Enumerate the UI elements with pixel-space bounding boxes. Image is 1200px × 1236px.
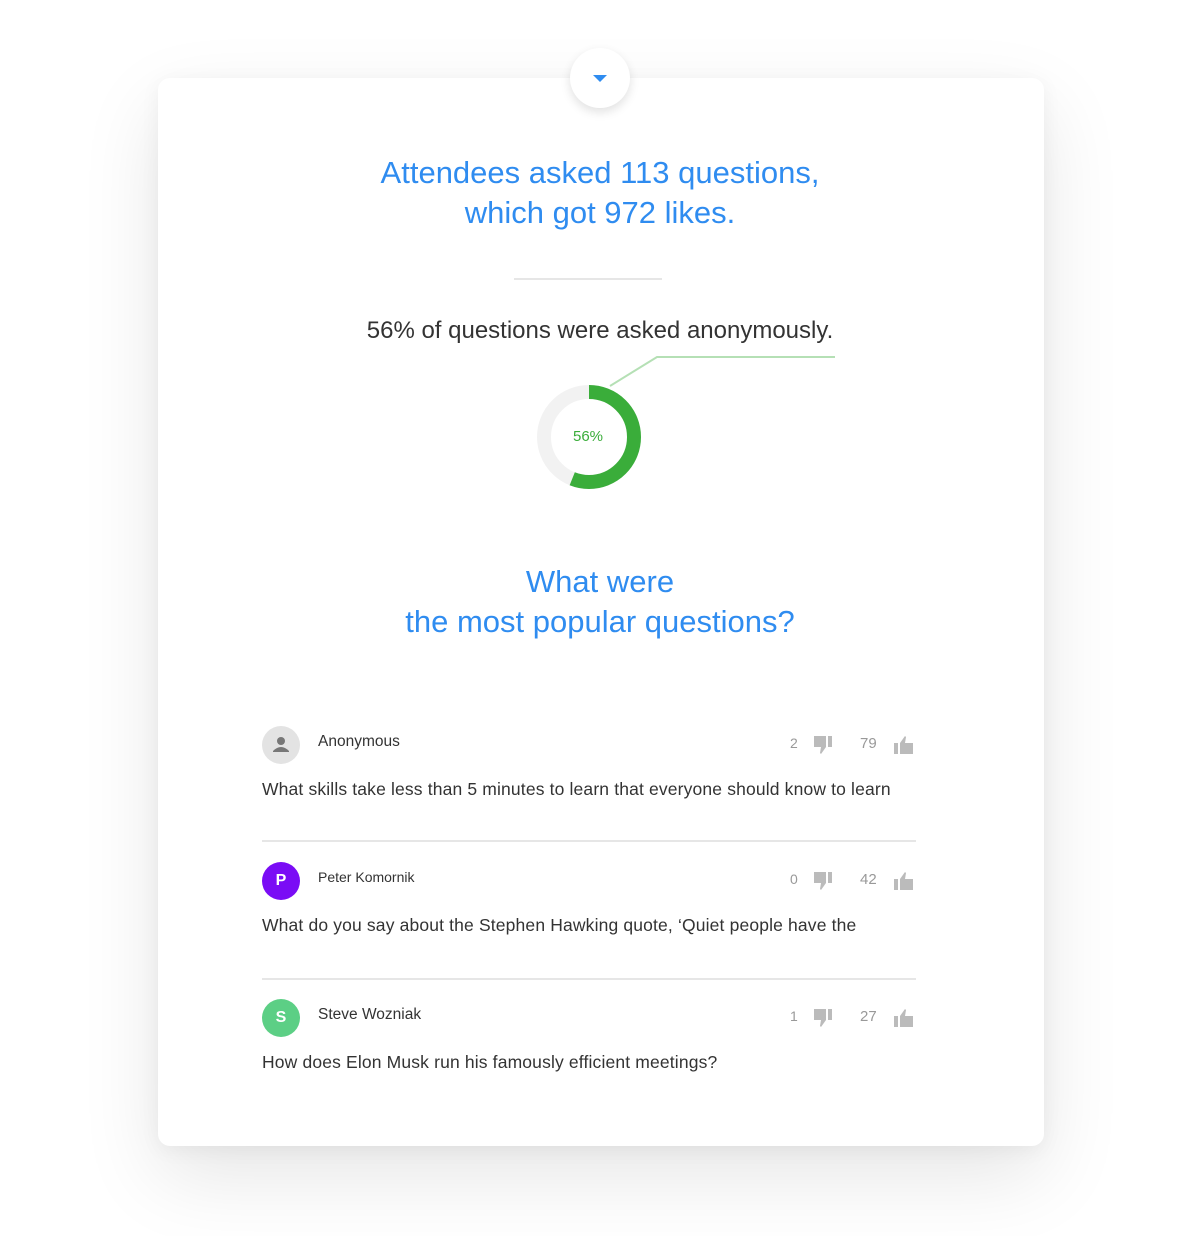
heading: popular questions: the most popular questions?	[405, 604, 795, 639]
question 1	[262, 726, 913, 799]
question 2: 42	[860, 871, 877, 888]
icon: dropdown button	[570, 48, 630, 108]
question 1: What skills take less than 5 minutes to learn that everyone should know to learn	[262, 779, 891, 799]
question 2: P	[276, 872, 286, 889]
question 2: What do you say about the Stephen Hawking quote, ‘Quiet people have the	[262, 915, 856, 935]
question 3: 27	[860, 1008, 877, 1025]
question 2: 0	[790, 871, 798, 887]
question 3: Steve Wozniak	[318, 1006, 421, 1023]
donut chart: 56%	[573, 428, 603, 445]
donut chart	[537, 356, 835, 489]
question 3: 1	[790, 1008, 798, 1024]
question 1: Anonymous	[318, 733, 400, 750]
question 3	[262, 999, 913, 1072]
question 1: 79	[860, 735, 877, 752]
question 1: 2	[790, 735, 798, 751]
question 2: Peter Komornik	[318, 869, 414, 885]
heading: popular questions	[405, 564, 795, 639]
question 3: S	[276, 1009, 286, 1026]
title	[380, 155, 819, 230]
heading: popular questions: What were	[526, 564, 674, 599]
stat text: 56% of questions were asked anonymously.	[367, 317, 833, 344]
title: which got 972 likes.	[465, 195, 735, 230]
question 2	[262, 862, 913, 935]
card	[158, 78, 1044, 1146]
title: Attendees asked 113 questions,	[381, 155, 819, 190]
question 3: How does Elon Musk run his famously efficient meetings?	[262, 1052, 717, 1072]
